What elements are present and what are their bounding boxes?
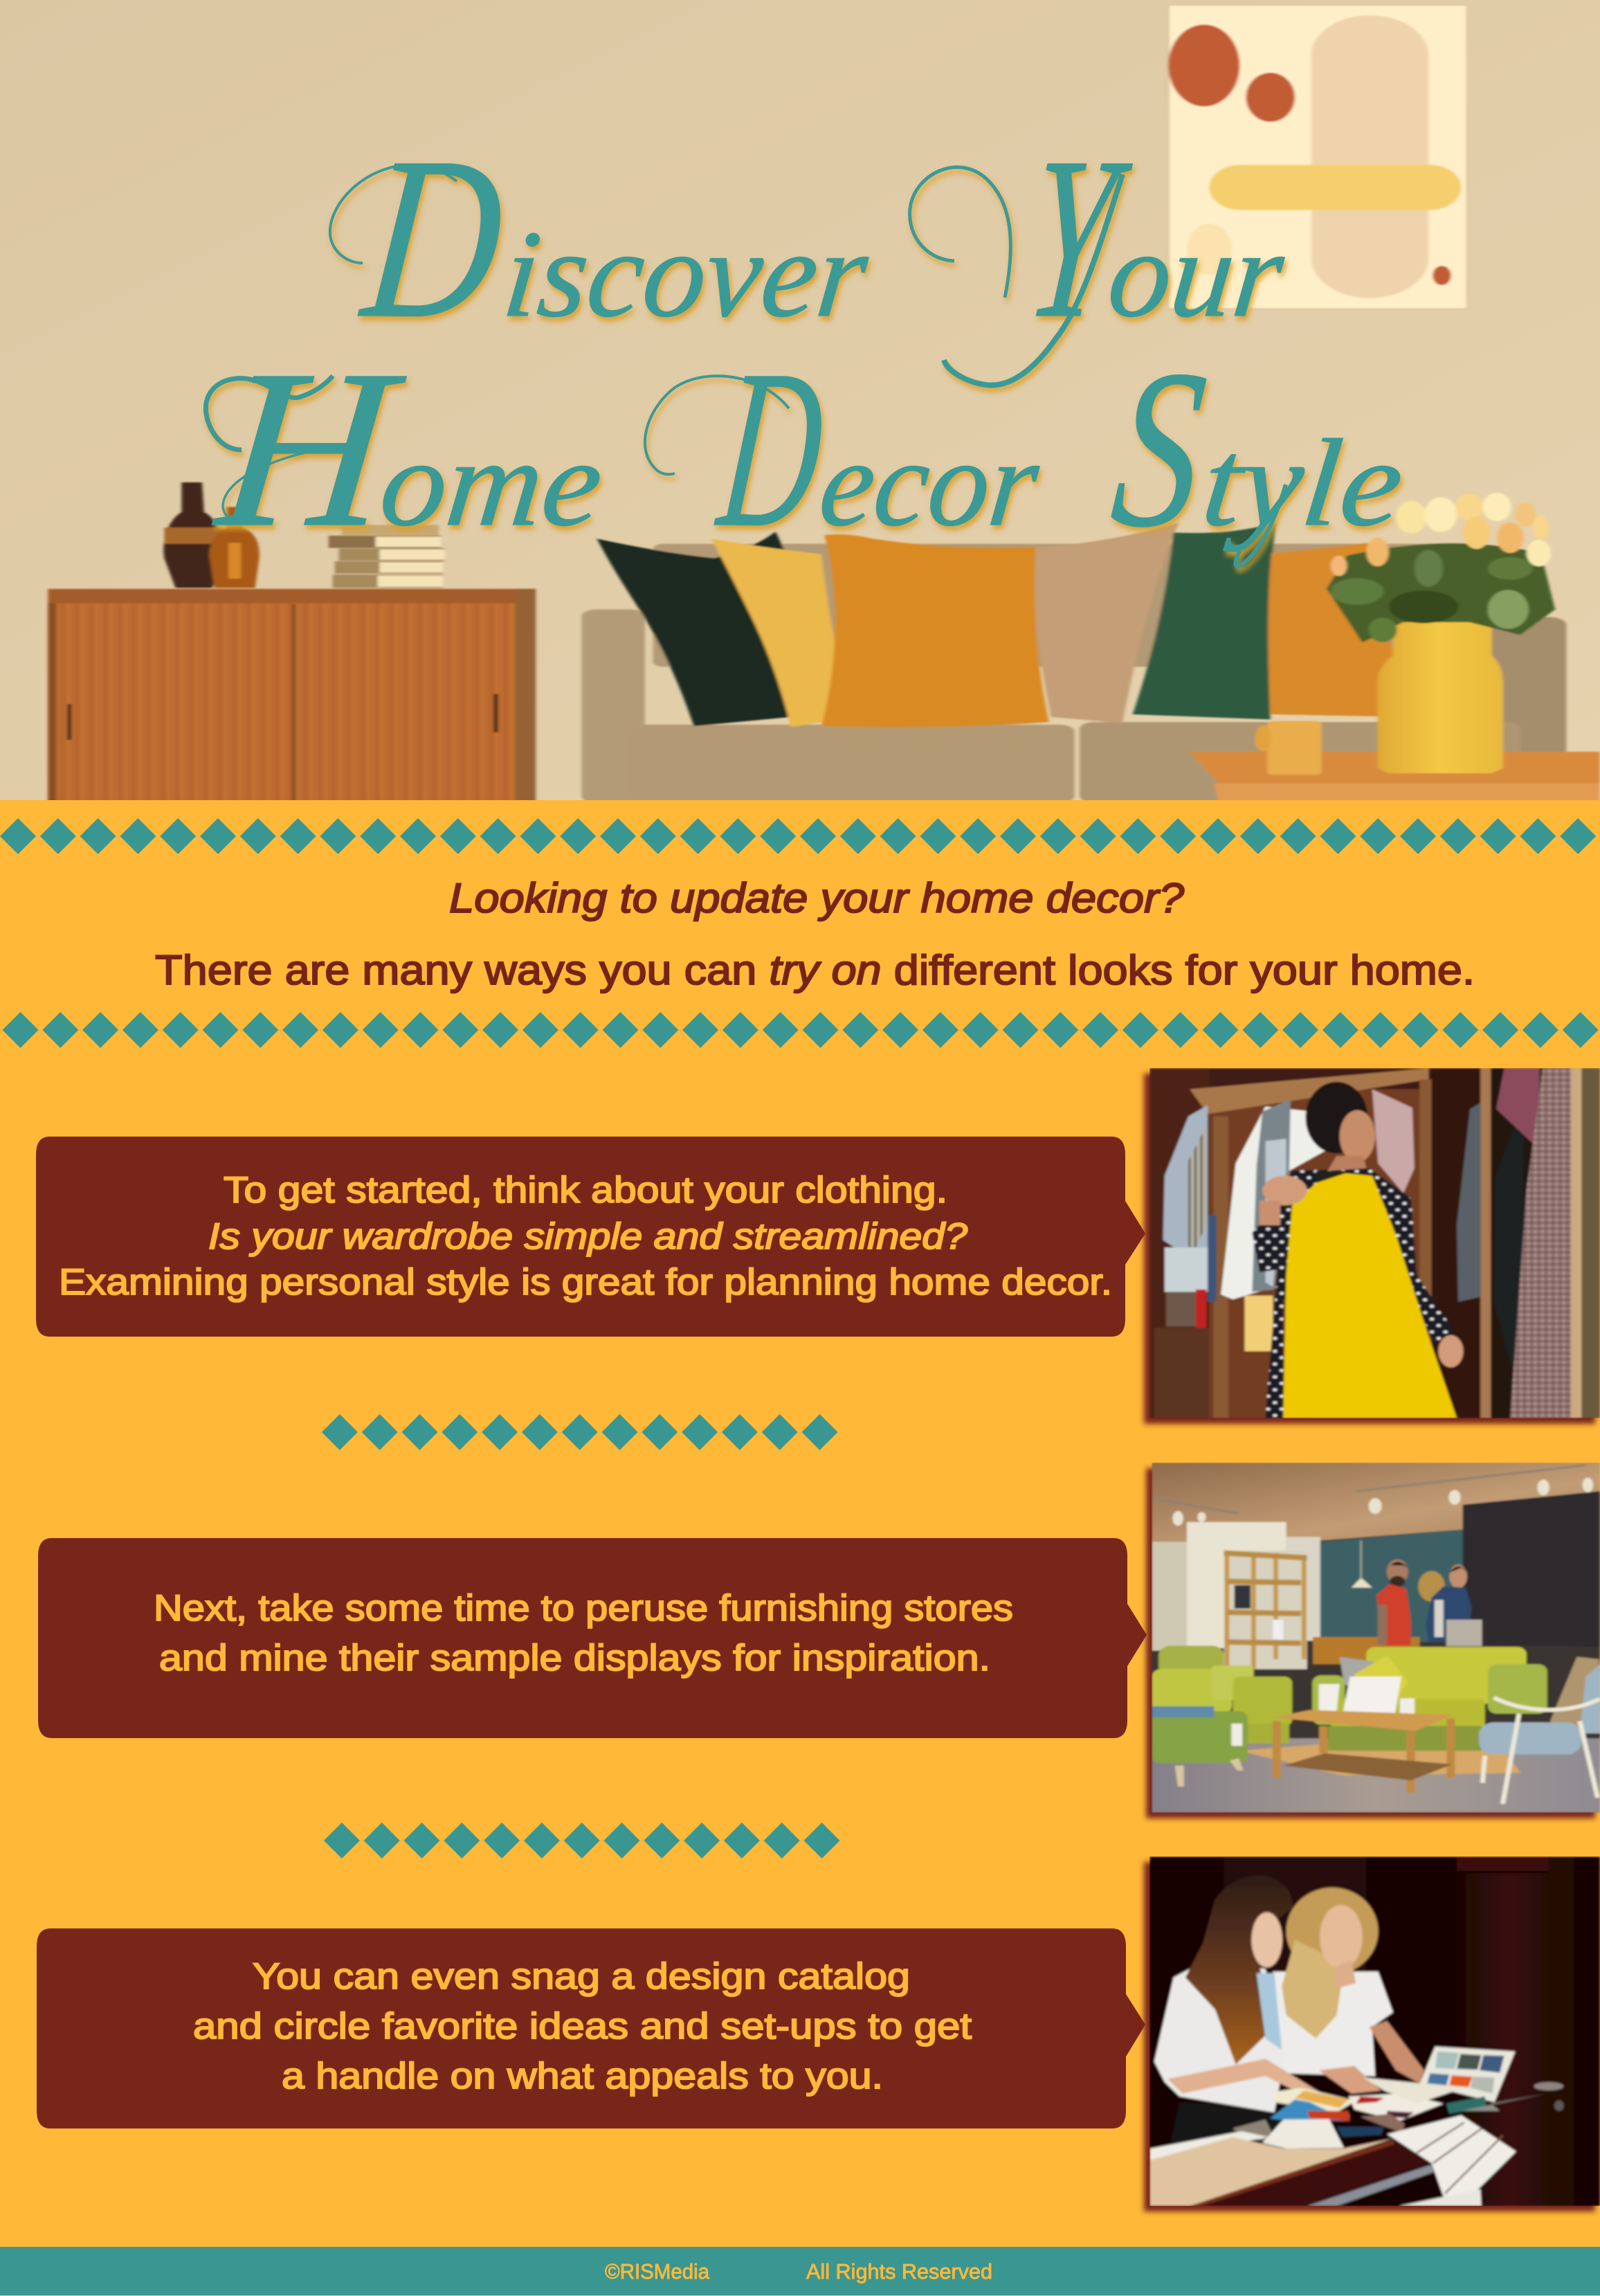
- title line 2: H: [206, 323, 415, 574]
- photo 3: two women reviewing catalog: [1144, 1856, 1600, 2212]
- title line 1: our: [1102, 205, 1291, 343]
- title line 2: ecor: [814, 414, 1045, 552]
- title line 1: Y: [981, 109, 1140, 366]
- flower bouquet: [1327, 493, 1555, 642]
- callout 3: design catalog: a handle on what appeals to you.: [282, 2056, 883, 2097]
- callout 1: clothing: To get started, think about your clothing.: [224, 1170, 947, 1211]
- callout 3: design catalog: and circle favorite ideas and set-ups to get: [193, 2006, 972, 2047]
- sofa: [581, 544, 1566, 803]
- callout 1: clothing: [36, 1137, 1145, 1337]
- title line 1: D: [352, 109, 514, 366]
- diamond divider bottom: [1, 1012, 1600, 1048]
- man in red shirt: [1376, 1559, 1411, 1645]
- title line 2: S: [1061, 323, 1215, 574]
- pillow: dark green: [597, 532, 791, 726]
- green ottoman: [1152, 1706, 1248, 1787]
- title: [206, 109, 1419, 574]
- callout 2: furnishing stores: [38, 1538, 1147, 1738]
- footer bar: [0, 2247, 1600, 2296]
- callout 3: design catalog: You can even snag a design catalog: [253, 1956, 910, 1997]
- intro question: Looking to update your home decor?: [449, 875, 1185, 921]
- hero photo: living room with sofa and sideboard: [0, 0, 1600, 803]
- title line 2: ome: [374, 414, 609, 552]
- vases: [163, 482, 260, 588]
- pillow: orange right: [1268, 543, 1408, 717]
- callout 2: furnishing stores: Next, take some time to peruse furnishing stores: [154, 1588, 1013, 1629]
- counter: [1149, 2115, 1516, 2206]
- title line 1: iscover: [498, 205, 875, 343]
- blue armchair: [1479, 1657, 1600, 1804]
- photo 1: woman holding yellow dress at wardrobe: [1144, 1068, 1600, 1424]
- footer rights: All Rights Reserved: [806, 2259, 992, 2284]
- yellow-green sofa: [1312, 1647, 1547, 1751]
- brunette woman: [1154, 1875, 1322, 2143]
- callout 1: clothing: Examining personal style is great for planning home decor.: [59, 1262, 1112, 1303]
- diamond divider small 1: [320, 1414, 840, 1450]
- footer credit: ©RISMedia: [605, 2259, 710, 2284]
- sideboard cabinet: [48, 589, 536, 803]
- side table: [1189, 752, 1600, 802]
- callout 2: furnishing stores: and mine their sample displays for inspiration.: [159, 1638, 990, 1679]
- pillow: mustard: [711, 539, 852, 727]
- green armchair: [1152, 1645, 1292, 1744]
- diamond divider small 2: [322, 1823, 842, 1859]
- pillow: forest green: [1133, 523, 1275, 719]
- title line 2: tyle: [1197, 414, 1410, 552]
- books: [329, 525, 445, 588]
- intro statement: There are many ways you can try on different looks for your home.: [155, 947, 1475, 993]
- diamond divider top: [0, 818, 1600, 854]
- wall art: [1168, 5, 1467, 309]
- catalog and swatches: [1233, 2047, 1547, 2143]
- photo 2: couple in furniture showroom: [1146, 1463, 1600, 1818]
- yellow vase: [1378, 621, 1503, 773]
- callout 1: clothing: Is your wardrobe simple and streamlined?: [208, 1216, 968, 1257]
- pillow: taupe: [1030, 523, 1179, 723]
- title line 2: [206, 323, 1419, 574]
- title line 1: [330, 109, 1300, 385]
- mug: [1255, 721, 1321, 775]
- coffee table: [1273, 1710, 1454, 1793]
- title line 2: D: [677, 323, 835, 574]
- blonde woman: [1273, 1888, 1424, 2093]
- callout 3: design catalog: [37, 1928, 1145, 2128]
- intro text: [155, 875, 1475, 993]
- pillow: orange centre: [821, 534, 1049, 727]
- woman in denim jacket: [1426, 1564, 1482, 1646]
